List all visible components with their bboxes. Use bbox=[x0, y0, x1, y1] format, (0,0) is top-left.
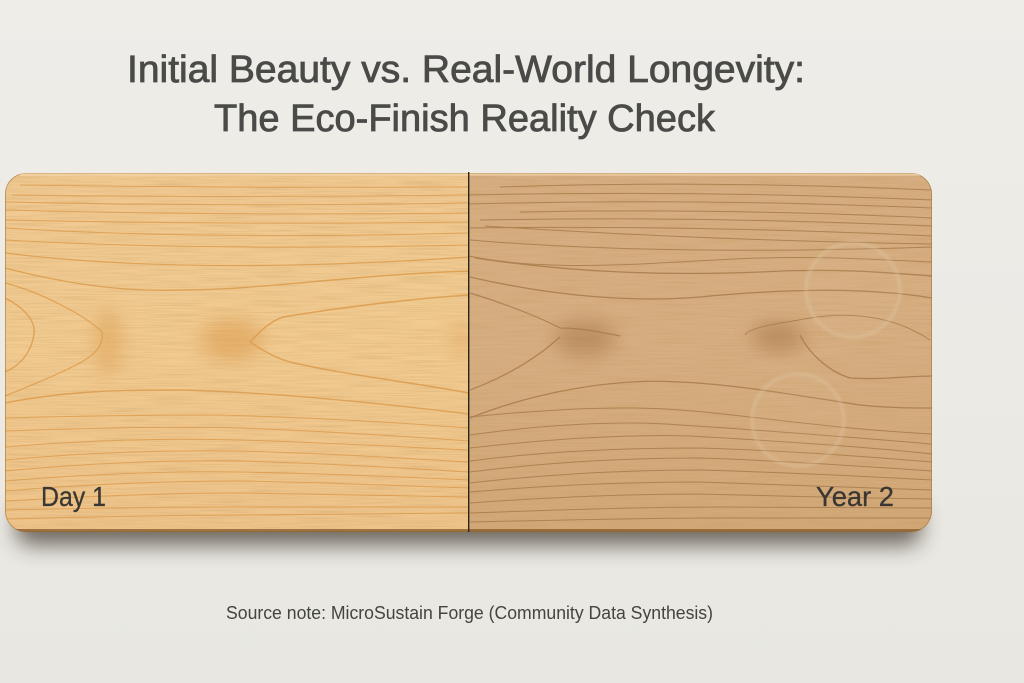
title: The Eco-Finish Reality Check bbox=[214, 98, 716, 140]
board shadow bbox=[16, 505, 921, 545]
panel: Day 1 fresh finish bbox=[5, 173, 474, 532]
title bbox=[127, 49, 805, 140]
label: Day 1: Day 1 bbox=[41, 481, 106, 512]
water ring stain 2 bbox=[752, 374, 844, 466]
board edge shading bbox=[5, 173, 932, 532]
panel: Year 2 worn finish bbox=[469, 173, 932, 532]
title: Initial Beauty vs. Real-World Longevity: bbox=[127, 49, 805, 91]
panel: wood board comparison bbox=[5, 173, 932, 532]
divider line bbox=[468, 172, 469, 532]
source note: Source note: MicroSustain Forge (Community Data Synthesis) bbox=[226, 603, 713, 623]
water ring stain 1 bbox=[806, 243, 900, 337]
label: Year 2: Year 2 bbox=[816, 481, 894, 512]
